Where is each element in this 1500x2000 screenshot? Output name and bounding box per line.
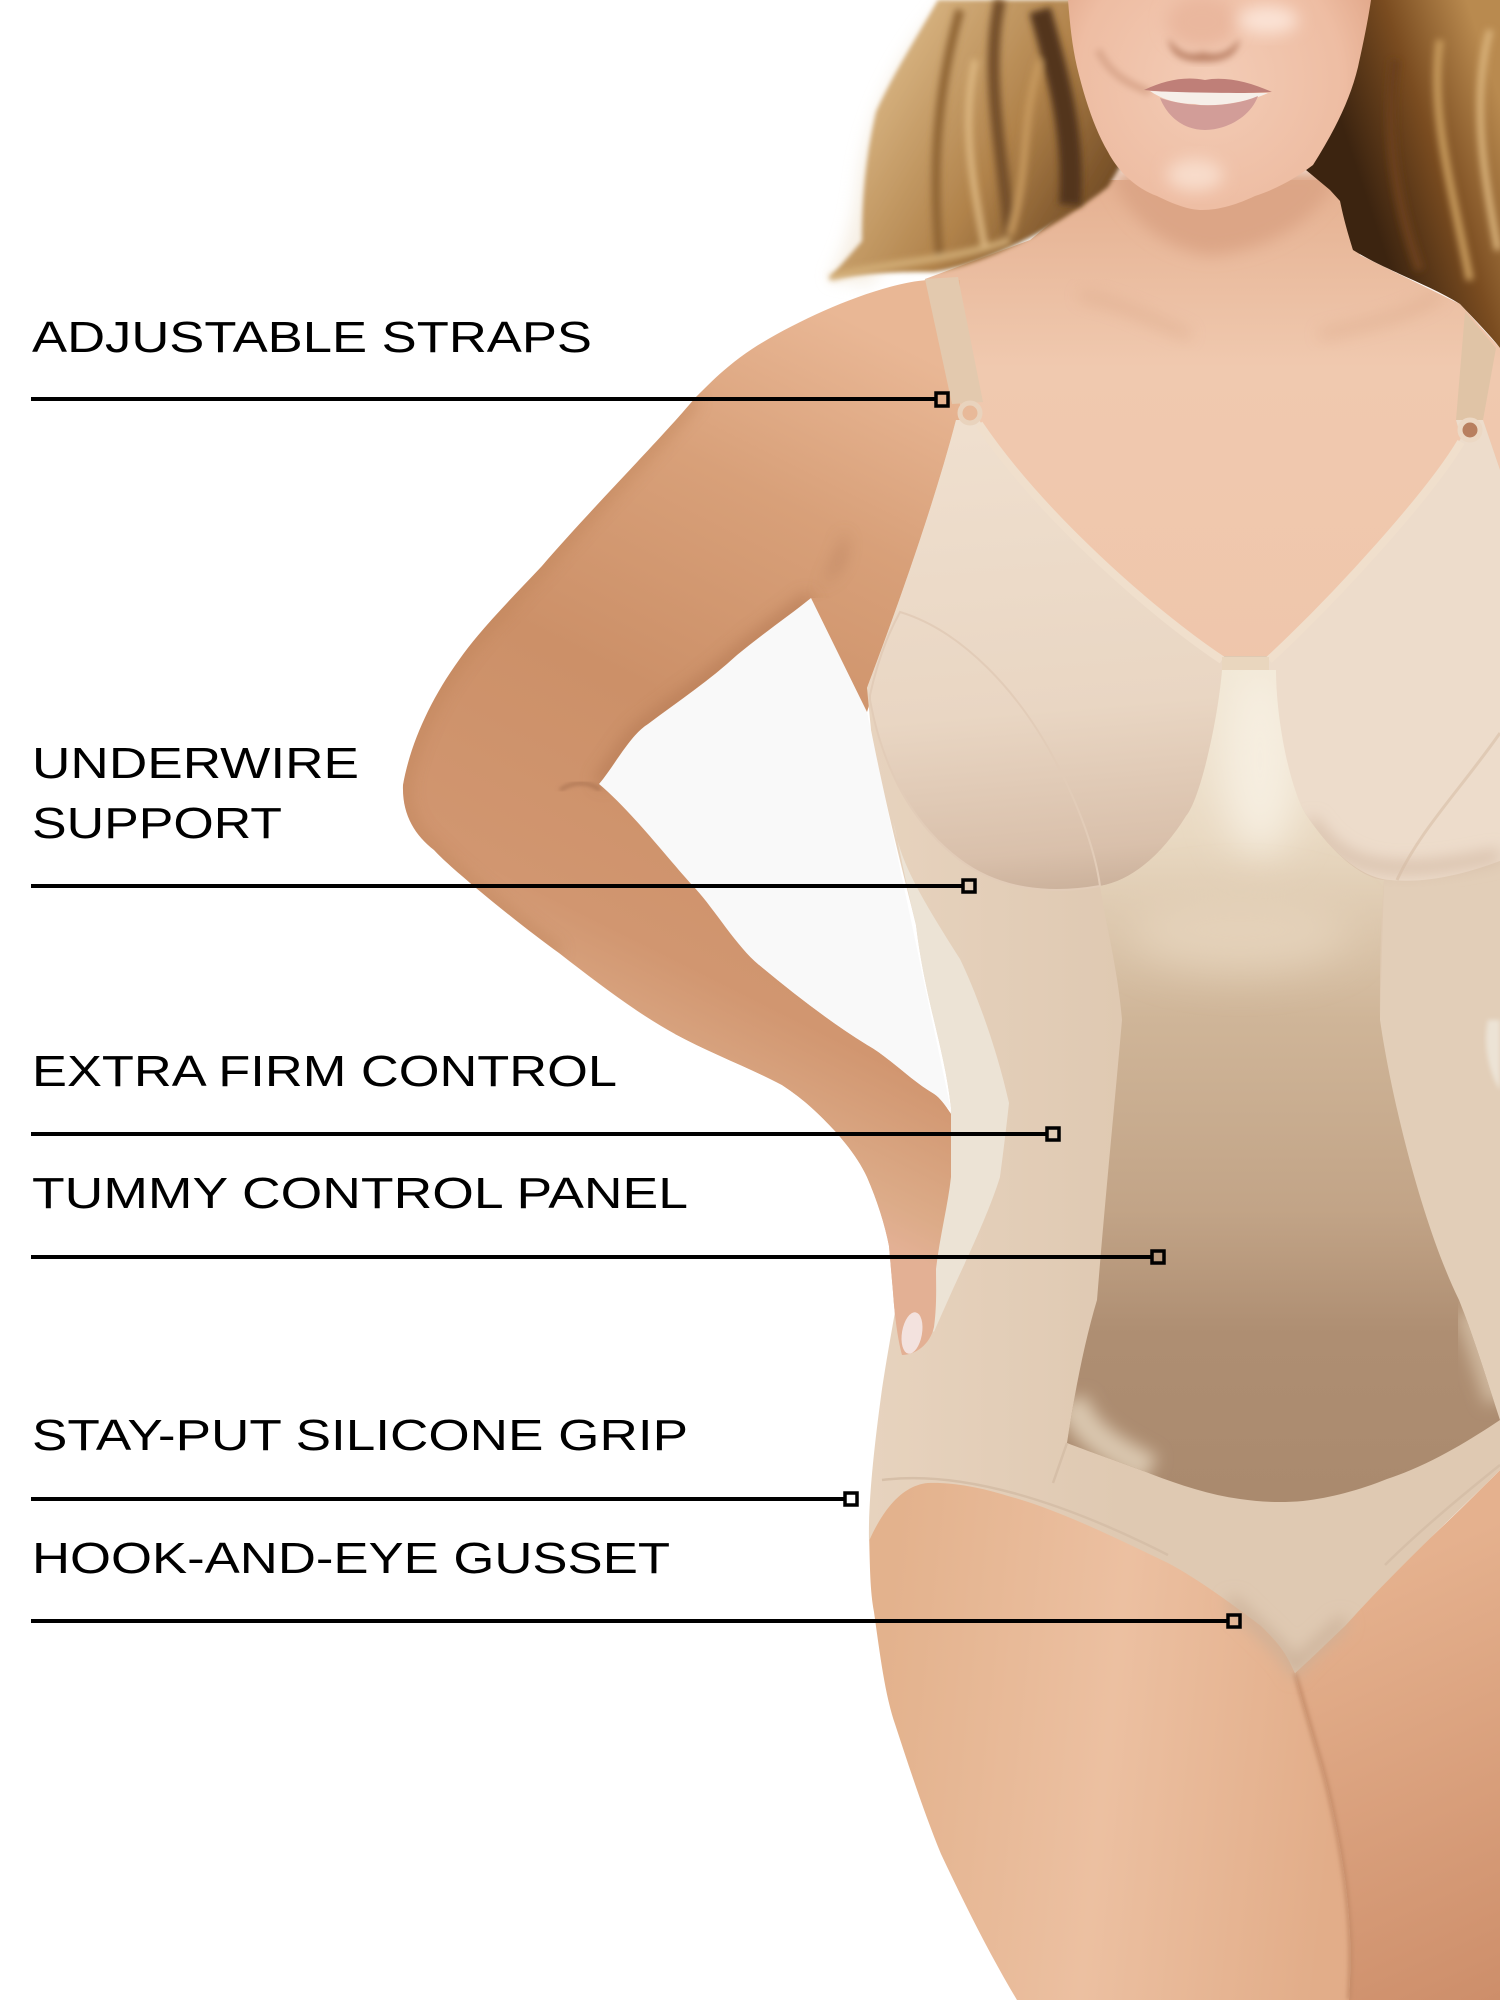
left strap ring	[960, 403, 980, 423]
callout: stay-put silicone grip	[31, 1411, 857, 1505]
upper lip	[1144, 78, 1272, 93]
right cup	[1269, 420, 1500, 881]
left hair	[829, 0, 1130, 279]
far thigh	[1295, 1470, 1500, 2000]
right hair	[1300, 0, 1500, 348]
near thigh	[869, 1450, 1350, 2000]
leader line	[31, 1497, 845, 1501]
fingernail	[899, 1311, 925, 1355]
callout: hook-and-eye gusset	[31, 1534, 1240, 1627]
collarbone shading	[1080, 295, 1440, 335]
arm and shoulder	[403, 280, 960, 1355]
label second line: SUPPORT	[32, 799, 282, 848]
face shape	[1068, 0, 1371, 210]
nose	[1166, 0, 1238, 48]
marker	[963, 880, 975, 892]
right strap	[1456, 312, 1496, 420]
callout: underwire support	[31, 739, 975, 892]
right lace panel	[1486, 1020, 1500, 1090]
chin highlight	[1167, 159, 1223, 191]
neck shadow under chin	[1108, 170, 1340, 255]
chest and neck skin	[870, 180, 1500, 680]
right cup seam	[1397, 733, 1500, 880]
arm soft edge shading	[403, 398, 811, 953]
bodysuit	[867, 277, 1500, 1673]
left strap	[925, 277, 983, 404]
face	[1068, 0, 1371, 210]
satin highlights	[1072, 665, 1500, 1470]
lace side panel	[893, 821, 1009, 1332]
marker	[1228, 1615, 1240, 1627]
nose shadow	[1168, 38, 1240, 62]
left hair wisps	[829, 0, 1000, 285]
callout: extra firm control	[31, 1047, 1059, 1140]
brief shading	[1230, 1600, 1345, 1668]
leader line	[31, 397, 936, 401]
lower lip	[1160, 96, 1258, 130]
center band	[1222, 657, 1269, 672]
leader line	[31, 1255, 1152, 1259]
marker	[1152, 1251, 1164, 1263]
bodysuit base	[867, 420, 1500, 1673]
marker	[1047, 1128, 1059, 1140]
left lower cup	[870, 612, 1100, 890]
cheek crease	[1098, 50, 1150, 92]
hand resting on hip	[675, 965, 951, 1355]
right strap ring	[1460, 420, 1480, 440]
right side panel shade	[1380, 861, 1500, 1420]
front brief panel seams	[882, 1443, 1500, 1565]
leader line	[31, 1619, 1228, 1623]
marker	[845, 1493, 857, 1505]
marker	[936, 393, 948, 406]
label: TUMMY CONTROL PANEL	[32, 1169, 688, 1218]
cheek highlight	[1238, 6, 1298, 34]
label: HOOK-AND-EYE GUSSET	[32, 1534, 670, 1583]
satin tummy panel	[1067, 670, 1500, 1502]
neckline trim	[979, 424, 1461, 660]
figure: model wearing the bodysuit	[403, 0, 1500, 2000]
teeth	[1150, 91, 1268, 105]
leader line	[31, 884, 963, 888]
label: STAY-PUT SILICONE GRIP	[32, 1411, 688, 1460]
right cup under-shadow	[1310, 820, 1500, 868]
label: UNDERWIRE	[32, 739, 359, 788]
backdrop: gap between arm and torso	[580, 575, 951, 1110]
left cup	[867, 420, 1222, 890]
callout: adjustable straps	[31, 313, 948, 406]
callout: tummy control panel	[31, 1169, 1164, 1263]
hair strands	[830, 0, 1498, 280]
thigh shading	[1295, 1673, 1350, 2000]
label: ADJUSTABLE STRAPS	[32, 313, 592, 362]
leader line	[31, 1132, 1047, 1136]
label: EXTRA FIRM CONTROL	[32, 1047, 617, 1096]
underarm shadow	[811, 530, 860, 660]
